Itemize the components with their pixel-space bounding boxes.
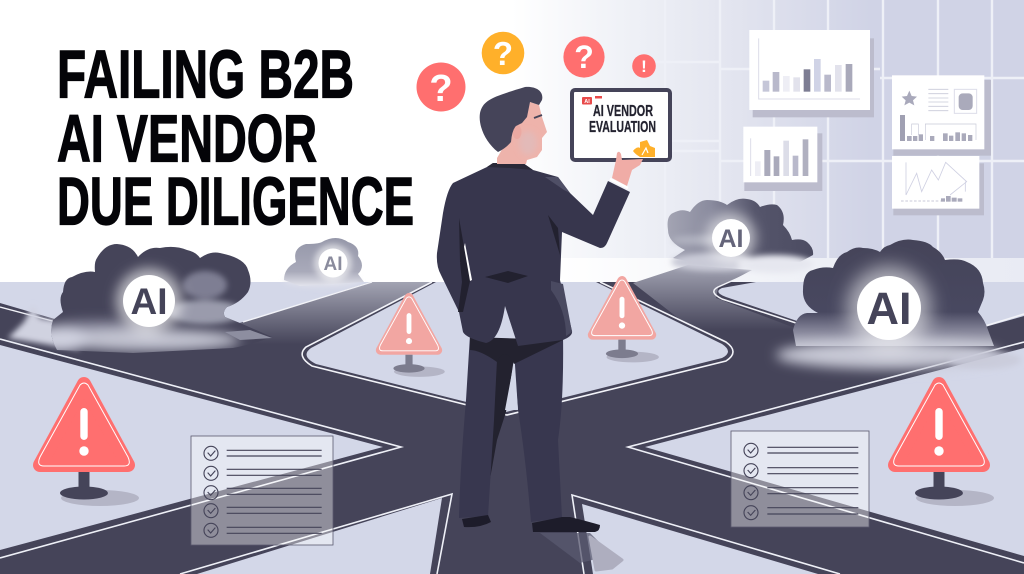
title (57, 36, 414, 240)
checklist: right (731, 431, 869, 527)
AI badge far (712, 219, 750, 257)
tablet text: EVALUATION (589, 119, 656, 136)
tablet text (589, 103, 656, 136)
question bubble: red left: ? (429, 68, 453, 110)
warning sign: right mid (592, 280, 659, 362)
ground and road network (0, 265, 1024, 574)
question bubble: red left (416, 62, 466, 112)
question bubble: orange (482, 32, 524, 74)
question bubble: red right (563, 36, 605, 78)
title: DUE DILIGENCE (57, 164, 414, 240)
title: FAILING B2B (57, 36, 354, 112)
AI badge far: AI (718, 225, 744, 253)
warning sign: left large (39, 383, 139, 506)
shoe shadow (540, 533, 622, 570)
question bubble: red right: ? (574, 39, 594, 75)
jacket (437, 163, 630, 346)
grass: left middle (0, 345, 383, 550)
tablet logo: AI (584, 99, 590, 105)
AI badge right (857, 276, 921, 340)
warning sign: right large (894, 383, 994, 506)
AI badge left: AI (130, 281, 168, 322)
alert bubble: ! (641, 57, 647, 76)
cloud: far right AI (668, 199, 813, 273)
chart panel: small bar chart (743, 127, 822, 191)
grass: centre island (307, 282, 728, 412)
cloud: left large AI (8, 244, 272, 353)
far right road fading into the distance (633, 265, 800, 352)
background wall with window grid (0, 0, 1024, 282)
AI badge left (123, 275, 175, 327)
trousers (459, 335, 563, 522)
AI badge right: AI (866, 283, 912, 334)
far left road fading into the distance (150, 282, 432, 365)
grass: right middle (645, 348, 1024, 556)
chart panel: large bar chart (749, 30, 874, 117)
orange splat (633, 140, 655, 157)
cloud: small AI (284, 238, 364, 287)
arm gap and jacket details (458, 163, 572, 336)
raised hand and cuff (610, 152, 643, 188)
checklist: left (191, 436, 333, 545)
warning sign: left mid (380, 297, 445, 377)
tablet text: AI VENDOR (593, 103, 653, 120)
question bubble: orange: ? (493, 35, 513, 72)
title: AI VENDOR (57, 102, 317, 176)
cloud: right large AI (776, 240, 1021, 369)
grass: upper left (0, 282, 370, 349)
AI badge small: AI (324, 254, 342, 275)
chart panel: star summary card (892, 75, 991, 156)
chart panel: line chart (892, 156, 984, 215)
alert bubble (632, 54, 656, 78)
businessman seen from behind (437, 87, 630, 570)
grass: left bottom (197, 498, 442, 574)
grass: right bottom (582, 504, 818, 574)
grass: far right island (718, 282, 1024, 327)
head (480, 87, 547, 164)
tablet: AI vendor evaluation (572, 90, 670, 160)
shoes (462, 515, 600, 532)
floating chart panels (743, 30, 991, 215)
white shirt collar (489, 158, 531, 166)
